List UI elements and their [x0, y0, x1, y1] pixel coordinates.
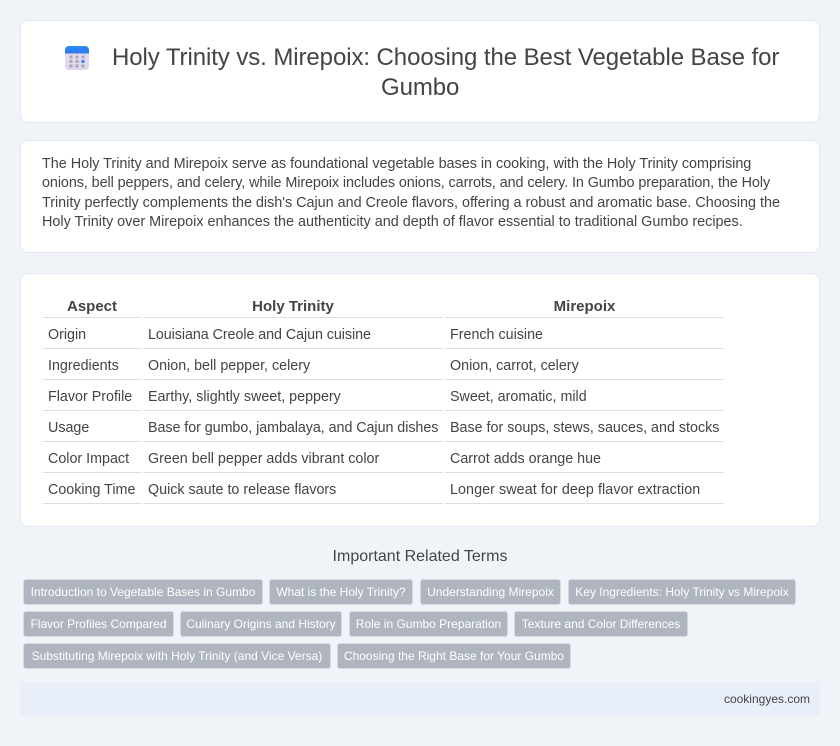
tag: [349, 611, 508, 637]
tag: Substituting Mirepoix with Holy Trinity (and Vice Versa): [32, 649, 322, 663]
comparison table: Base for soups, stews, sauces, and stocks: [450, 420, 719, 436]
intro text: Holy Trinity over Mirepoix enhances the authenticity and depth of flavor essential to traditional Gumbo recipes.: [42, 214, 743, 230]
intro text: onions, bell peppers, and celery, while Mirepoix includes onions, carrots, and celery. In Gumbo preparation, the Holy: [42, 175, 770, 191]
tag: [23, 643, 331, 669]
heading: related terms: Important Related Terms: [333, 548, 507, 565]
title: Holy Trinity vs. Mirepoix: Choosing the Best Vegetable Base for: [112, 44, 779, 71]
comparison table: Flavor Profile: [48, 389, 132, 405]
tag: Key Ingredients: Holy Trinity vs Mirepoix: [575, 585, 789, 599]
intro text: The Holy Trinity and Mirepoix serve as foundational vegetable bases in cooking, with the Holy Trinity comprising: [42, 156, 751, 172]
comparison table: Carrot adds orange hue: [450, 451, 601, 467]
tag: [269, 579, 413, 605]
tag: Choosing the Right Base for Your Gumbo: [344, 649, 564, 663]
comparison table: Longer sweat for deep flavor extraction: [450, 482, 700, 498]
tag: [23, 579, 263, 605]
header: Mirepoix: Mirepoix: [554, 298, 615, 315]
intro text: [42, 156, 780, 230]
tag: [514, 611, 688, 637]
panel: comparison table card: [20, 273, 820, 527]
comparison table: Cooking Time: [48, 482, 135, 498]
related term tags: [23, 579, 796, 669]
comparison table: Green bell pepper adds vibrant color: [148, 451, 379, 467]
comparison table: Louisiana Creole and Cajun cuisine: [148, 327, 371, 343]
comparison table: Base for gumbo, jambalaya, and Cajun dishes: [148, 420, 438, 436]
comparison table: Usage: [48, 420, 89, 436]
tag: [420, 579, 561, 605]
comparison table: Sweet, aromatic, mild: [450, 389, 587, 405]
icon: calendar: [65, 46, 89, 70]
comparison table: Origin: [48, 327, 86, 343]
title: Gumbo: [381, 74, 459, 101]
comparison table: Onion, carrot, celery: [450, 358, 579, 374]
footer source text: cookingyes.com: [724, 692, 810, 706]
footer bar: [20, 682, 820, 716]
comparison table: French cuisine: [450, 327, 543, 343]
tag: Understanding Mirepoix: [427, 585, 554, 599]
panel: intro card: [20, 140, 820, 253]
header: Aspect: Aspect: [67, 298, 117, 315]
comparison table: Onion, bell pepper, celery: [148, 358, 310, 374]
tag: Culinary Origins and History: [186, 617, 336, 631]
comparison table: [43, 298, 724, 504]
title: [112, 44, 779, 101]
header: Holy Trinity: Holy Trinity: [252, 298, 334, 315]
comparison table: Ingredients: [48, 358, 119, 374]
tag: Texture and Color Differences: [522, 617, 680, 631]
comparison table: Earthy, slightly sweet, peppery: [148, 389, 341, 405]
comparison table: Quick saute to release flavors: [148, 482, 336, 498]
intro text: Trinity perfectly complements the dish's Cajun and Creole flavors, offering a robust and aromatic base. Choosing the: [42, 195, 780, 211]
tag: [180, 611, 342, 637]
panel: title card: [20, 20, 820, 123]
tag: Role in Gumbo Preparation: [356, 617, 501, 631]
tag: [568, 579, 796, 605]
tag: What is the Holy Trinity?: [276, 585, 406, 599]
tag: Flavor Profiles Compared: [30, 617, 167, 631]
comparison table: Color Impact: [48, 451, 129, 467]
tag: [337, 643, 571, 669]
tag: Introduction to Vegetable Bases in Gumbo: [31, 585, 255, 599]
tag: [23, 611, 174, 637]
